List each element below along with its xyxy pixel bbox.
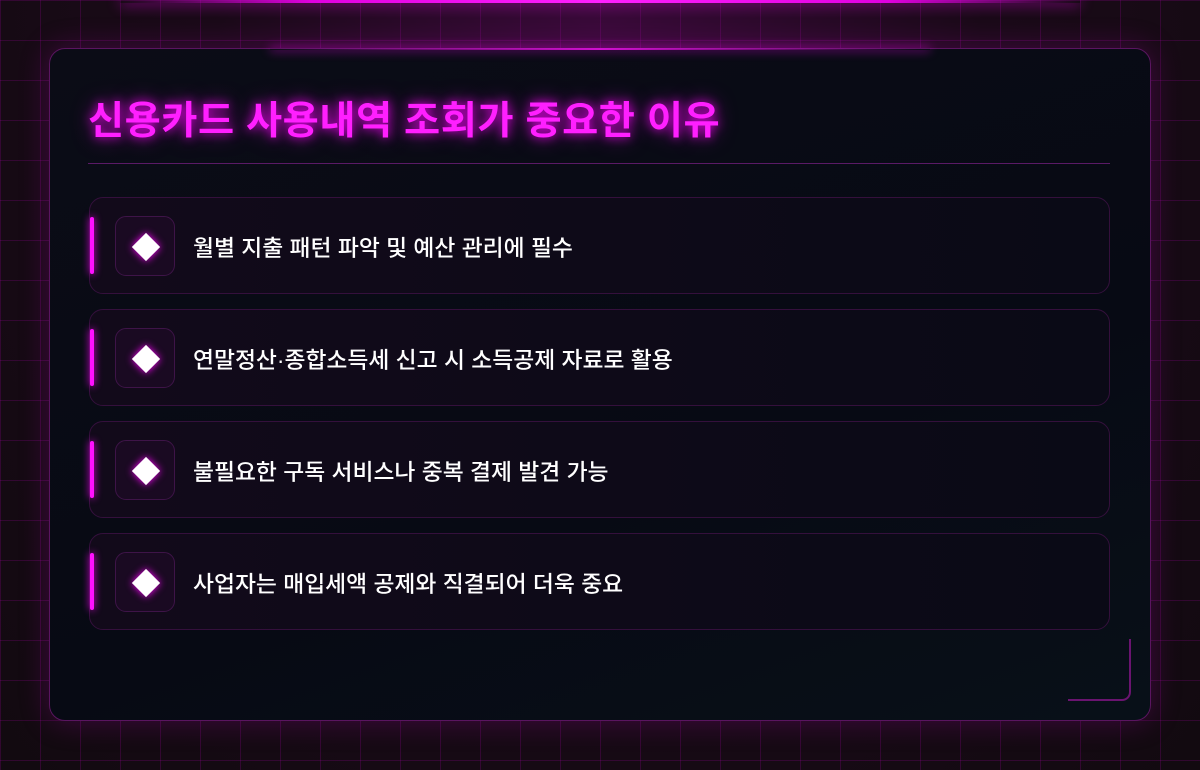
icon: diamond	[115, 328, 175, 388]
text 2: 연말정산·종합소득세 신고 시 소득공제 자료로 활용	[193, 347, 673, 373]
icon: diamond	[115, 552, 175, 612]
item 2	[89, 309, 1110, 406]
item 1	[89, 197, 1110, 294]
text 3: 불필요한 구독 서비스나 중복 결제 발견 가능	[193, 459, 609, 485]
icon: diamond	[115, 216, 175, 276]
text 4: 사업자는 매입세액 공제와 직결되어 더욱 중요	[193, 571, 623, 597]
item 3	[89, 421, 1110, 518]
icon: diamond	[115, 440, 175, 500]
title: 신용카드 사용내역 조회가 중요한 이유	[88, 99, 720, 143]
item 4	[89, 533, 1110, 630]
corner accent	[1068, 639, 1131, 701]
text 1: 월별 지출 패턴 파악 및 예산 관리에 필수	[193, 235, 573, 261]
